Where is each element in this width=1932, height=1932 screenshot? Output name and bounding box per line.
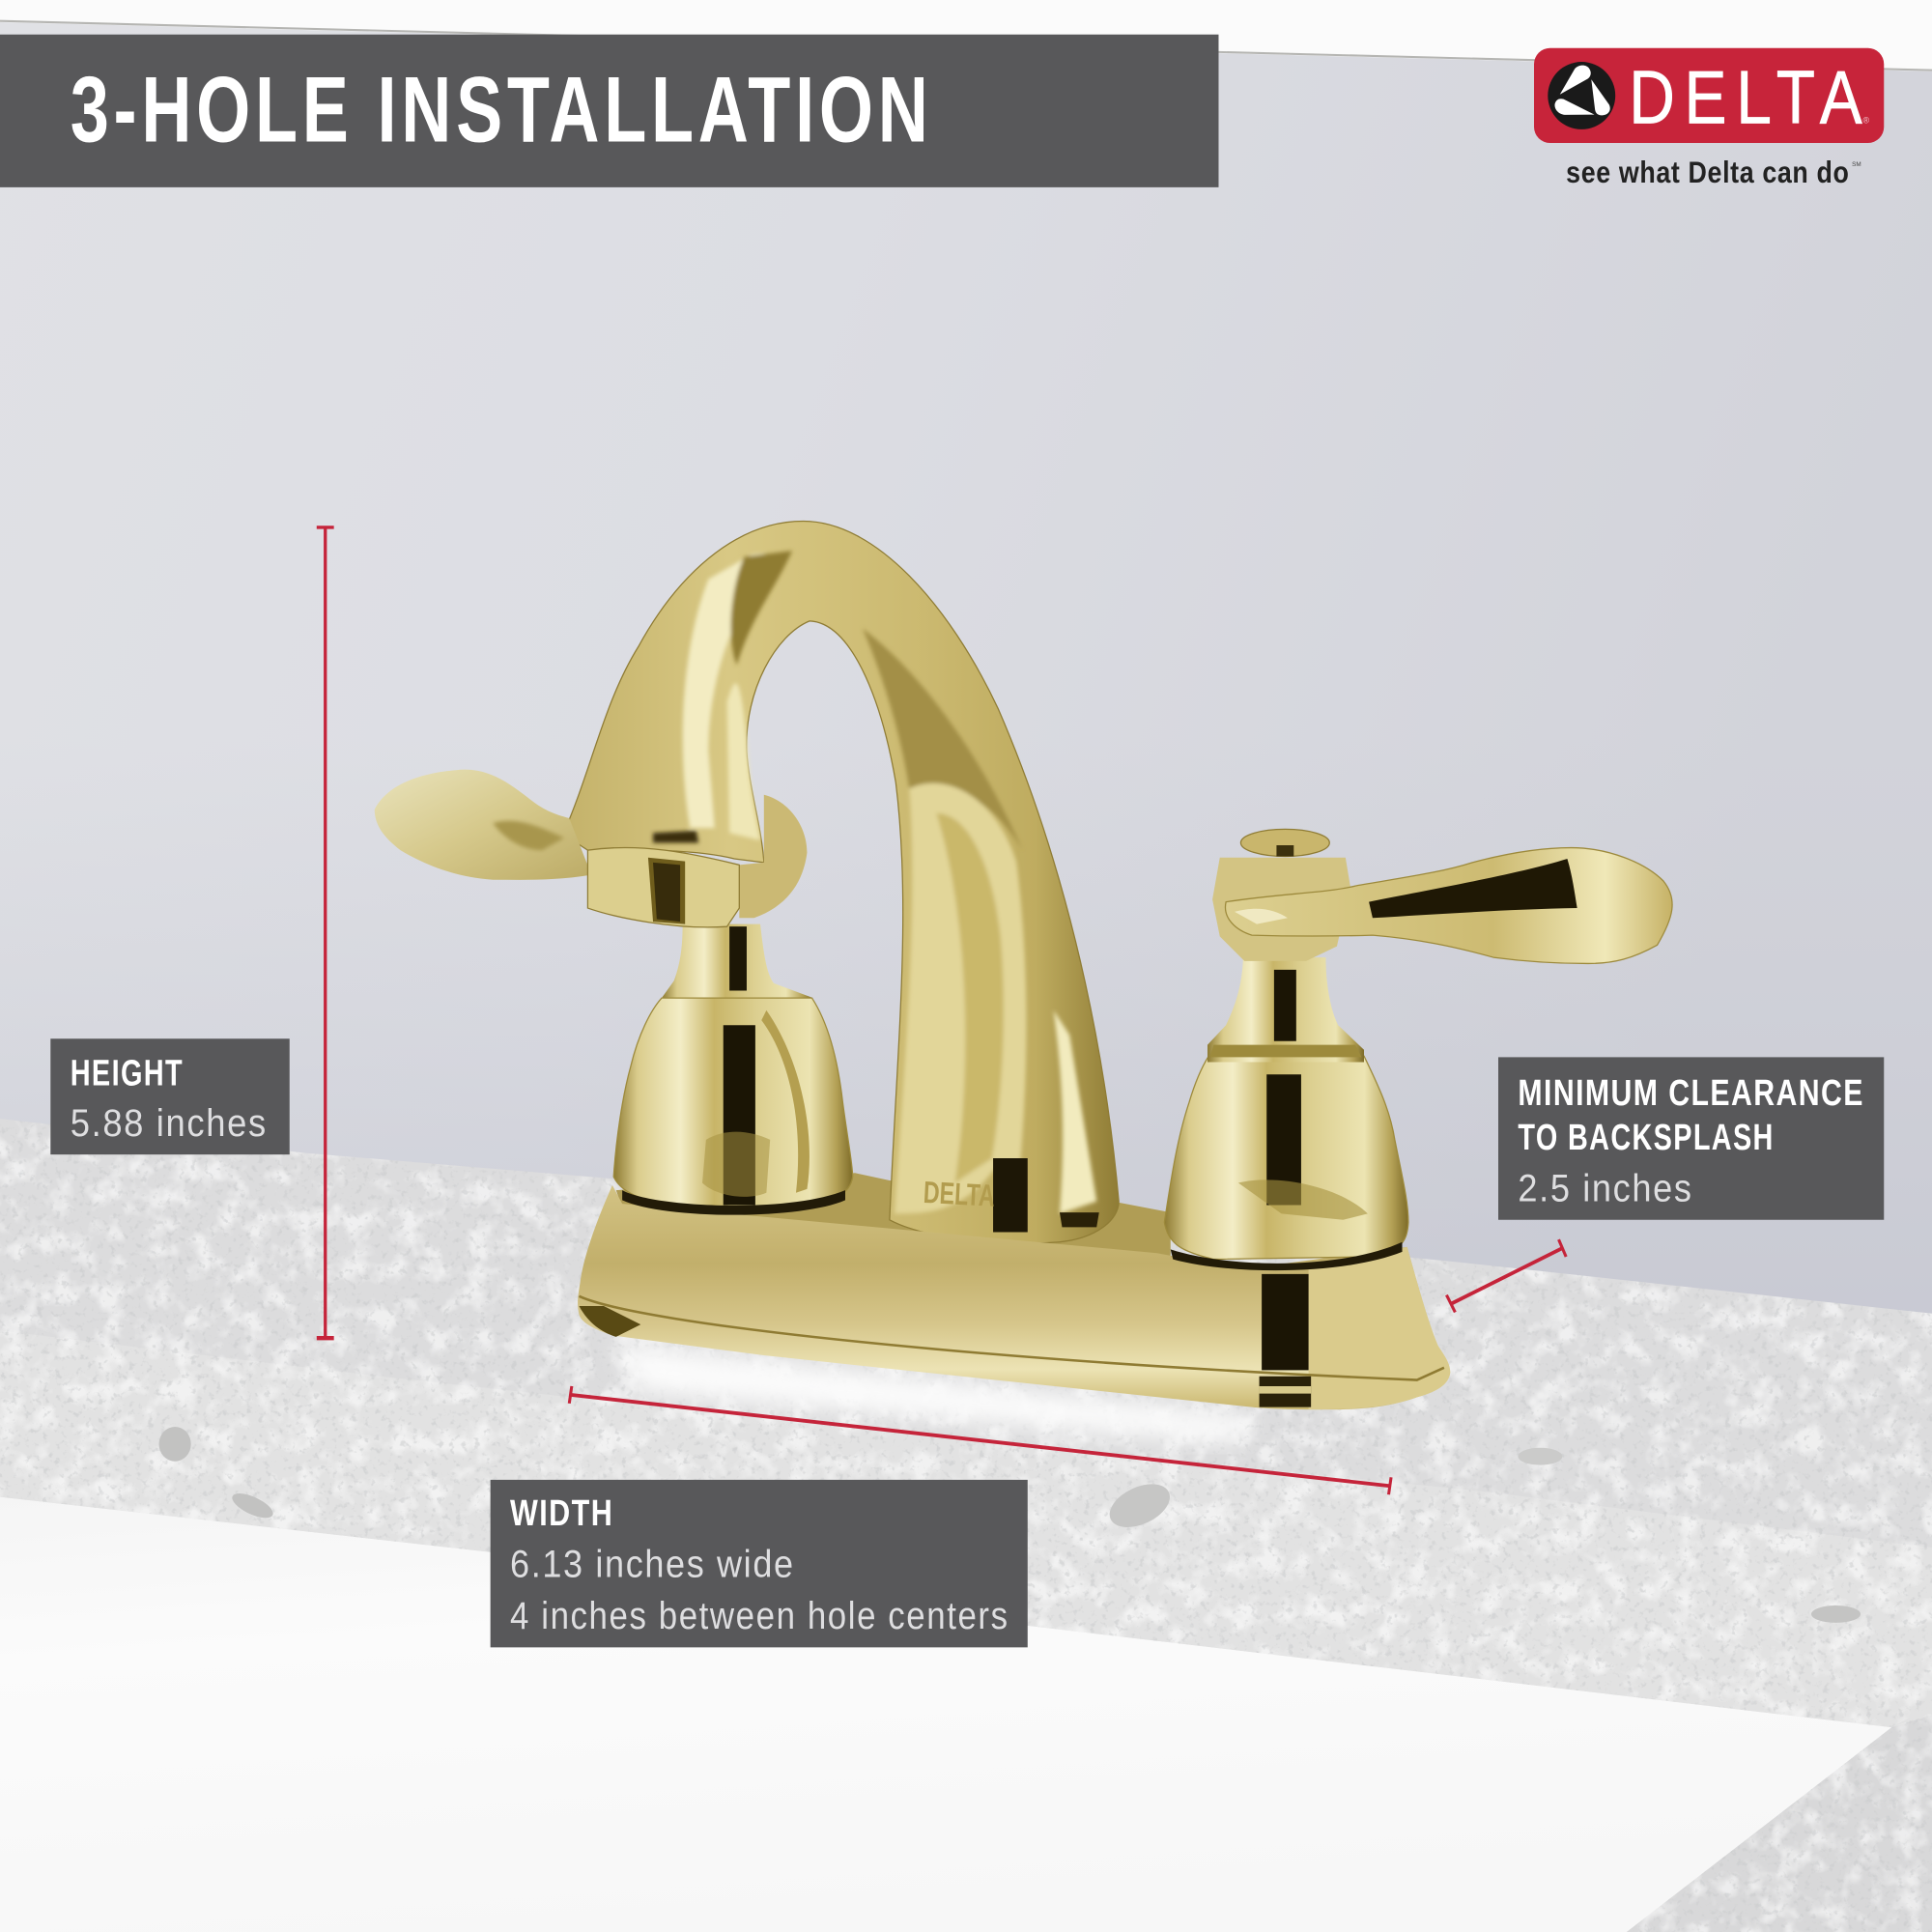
left valve neck [662,924,813,998]
logo badge [1534,48,1884,143]
deck top of the base [616,1173,1171,1257]
clearance value: 2.5 inches [1518,1168,1693,1210]
dimension line: width [569,1386,1391,1494]
icon: Delta triangle emblem [1548,62,1615,129]
countertop [0,1109,1932,1932]
hole centers value: 4 inches between hole centers [510,1595,1009,1637]
right hub and cap [1212,829,1350,961]
clearance heading line 2: TO BACKSPLASH [1518,1117,1775,1158]
height value: 5.88 inches [71,1102,268,1145]
DELTA mark on spout: DELTA [923,1175,996,1213]
left hub and stem [739,795,807,918]
height heading: HEIGHT [71,1053,184,1094]
right valve neck [1208,957,1364,1062]
registered mark: ® [1863,116,1870,126]
base black ring left [622,1190,845,1215]
title: 3-HOLE INSTALLATION [71,57,933,162]
left lever handle [375,770,591,880]
tagline: see what Delta can do [1566,155,1850,189]
faucet [375,522,1672,1444]
callout: height [50,1038,290,1154]
Delta logo [1534,48,1884,189]
right lever handle [1225,848,1672,963]
wall background [0,21,1932,1319]
title banner [0,35,1218,187]
faucet reflection on counter [613,1343,1257,1444]
callout: minimum clearance [1498,1057,1884,1220]
right valve bell [1164,1056,1408,1260]
width value: 6.13 inches wide [510,1544,795,1586]
spout [563,522,1119,1243]
width heading: WIDTH [510,1492,613,1534]
white sink basin [0,1497,1891,1932]
dimension line: clearance [1446,1239,1566,1312]
logo wordmark: DELTA [1629,57,1872,140]
left aerator [587,847,739,927]
left valve bell [613,998,853,1208]
base body [578,1185,1450,1409]
dimension line: height [317,527,334,1338]
callout: width [491,1480,1028,1647]
service mark: SM [1852,161,1861,168]
